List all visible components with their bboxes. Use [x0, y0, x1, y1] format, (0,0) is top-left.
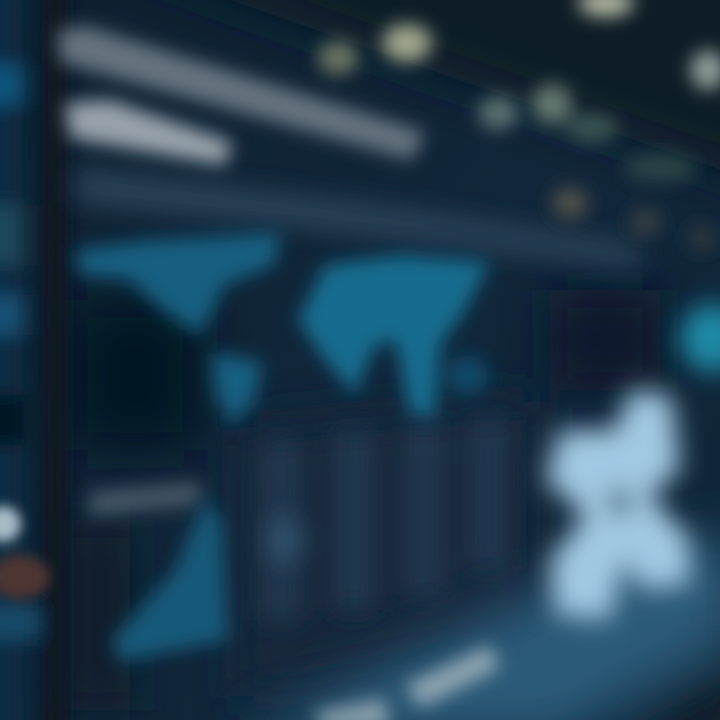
chart: world map right continent: [298, 255, 490, 420]
title: first blurred heading line: [58, 26, 425, 160]
dark top band: [60, 0, 720, 190]
lights: bokeh at top: [318, 0, 720, 251]
chart: lower left blue area: [112, 500, 228, 662]
title: second blurred heading line: [65, 100, 232, 166]
panel: left edge strip: [0, 0, 68, 720]
icon: bright glowing blob: [545, 390, 690, 620]
text block: faint subtitle band: [75, 168, 640, 270]
bottom blurred labels: [315, 645, 500, 720]
table: blurred columns: [262, 420, 506, 620]
chart: right edge teal mark: [680, 304, 720, 372]
chart: world map left continent: [75, 232, 280, 425]
icon: left edge white and red marker: [0, 506, 50, 599]
panel: dark map area: [70, 290, 660, 710]
text block: lower left label: [88, 482, 202, 516]
floor: lower right lit surface: [230, 530, 720, 720]
